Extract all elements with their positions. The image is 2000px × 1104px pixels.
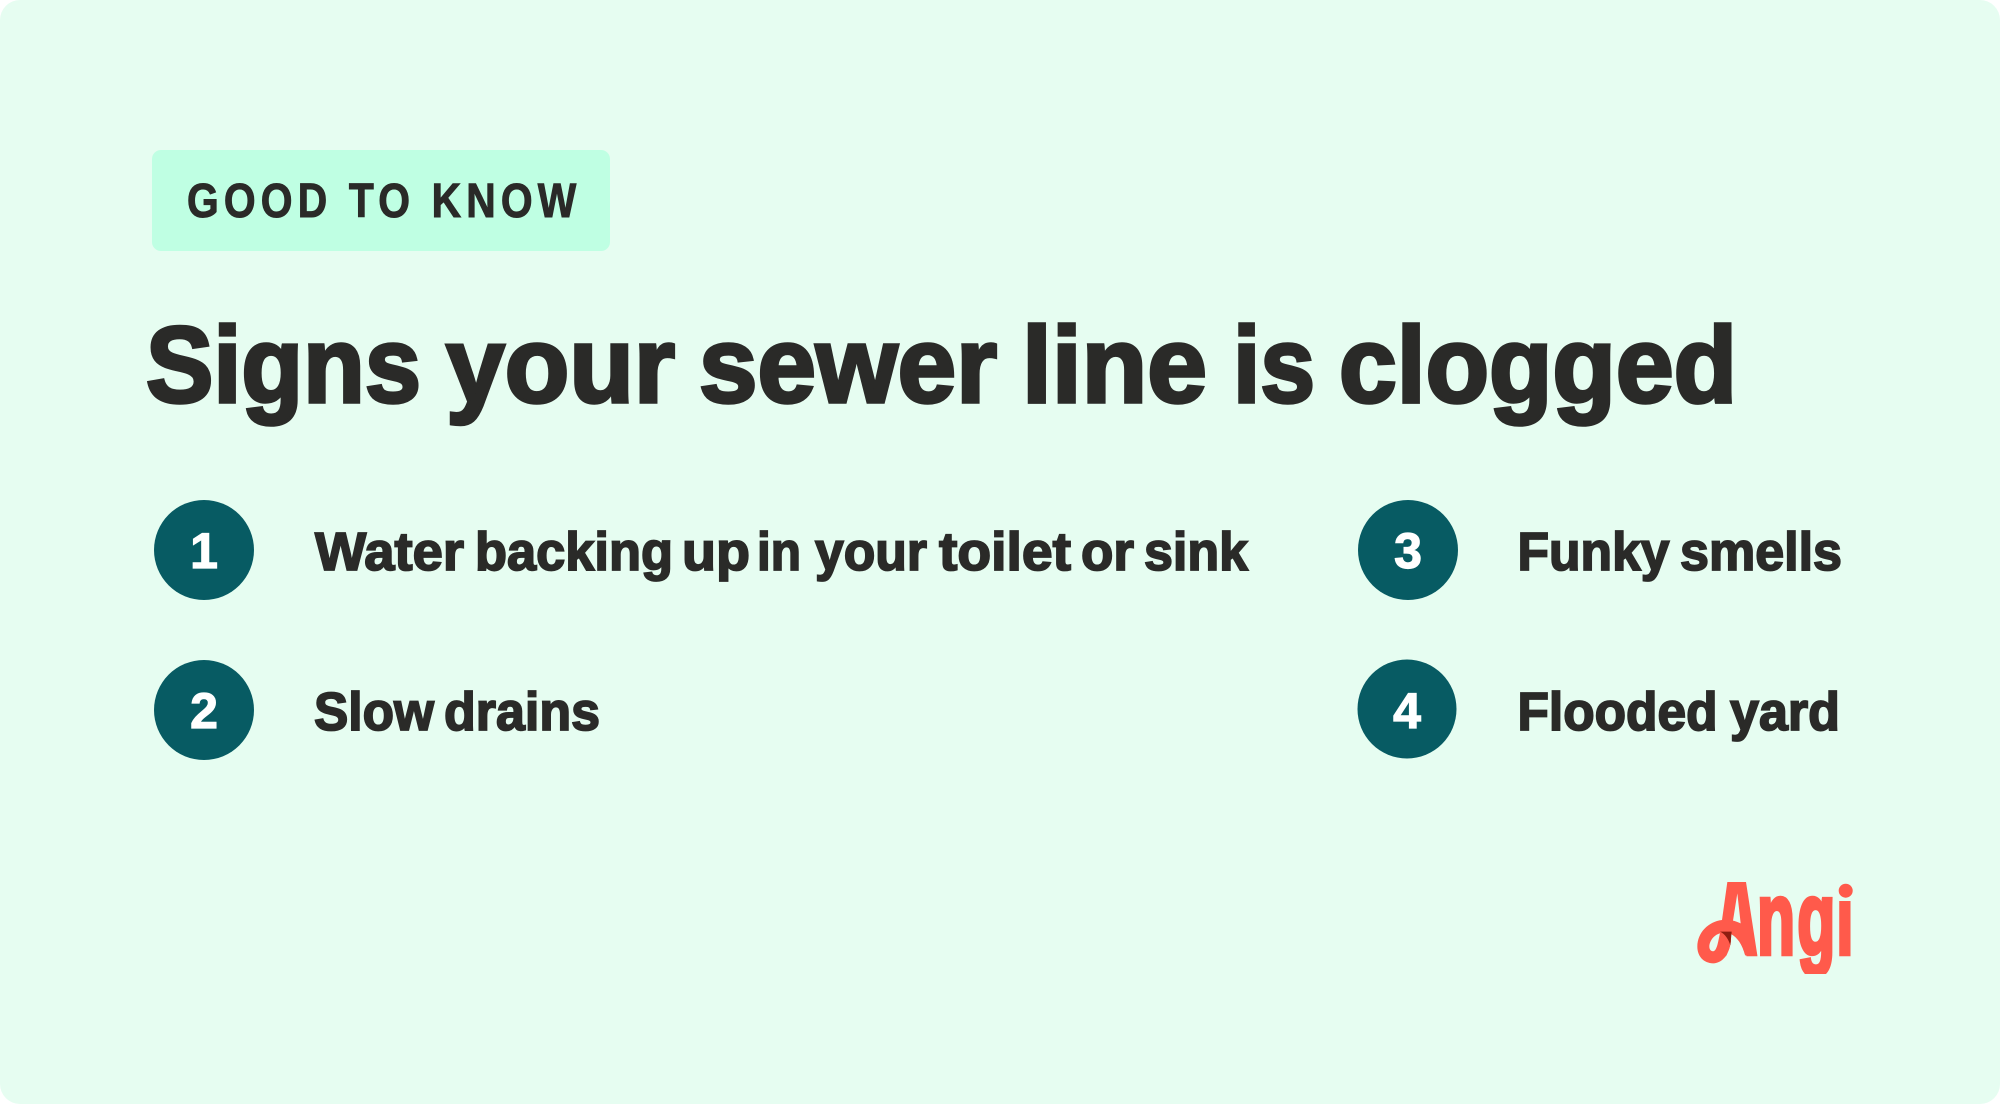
logo: Angi: Angi bbox=[1716, 861, 1854, 977]
list item 3 bbox=[1358, 500, 1842, 600]
list item 3: Funky bbox=[1518, 522, 1670, 582]
list item 1: or bbox=[1081, 522, 1134, 582]
list item 4: Flooded bbox=[1518, 682, 1718, 742]
list item 2 bbox=[154, 660, 600, 760]
list item 1: 1 bbox=[190, 523, 218, 579]
title: line bbox=[1022, 304, 1207, 425]
list item 2: drains bbox=[444, 682, 600, 742]
list item 4: 4 bbox=[1393, 683, 1421, 739]
list item 2: Slow bbox=[314, 682, 435, 742]
badge: good to know bbox=[152, 150, 610, 251]
list item 1: up bbox=[682, 522, 750, 582]
title: is bbox=[1233, 304, 1315, 425]
list item 1: sink bbox=[1144, 522, 1249, 582]
list item 4 bbox=[1358, 660, 1840, 758]
title: clogged bbox=[1339, 304, 1737, 425]
list item 1: Water bbox=[315, 522, 464, 582]
title bbox=[146, 304, 1737, 425]
list item 1: your bbox=[815, 522, 927, 582]
badge: good to know: GOOD TO KNOW bbox=[187, 175, 576, 228]
list item 3: smells bbox=[1680, 522, 1842, 582]
list item 3: 3 bbox=[1394, 523, 1422, 579]
list item 1: toilet bbox=[939, 522, 1071, 582]
title: Signs bbox=[146, 304, 421, 425]
list item 2: 2 bbox=[190, 683, 218, 739]
list item 4: yard bbox=[1730, 682, 1840, 742]
list item 1 bbox=[154, 500, 1249, 600]
list item 1: backing bbox=[475, 522, 673, 582]
list item 1: in bbox=[757, 522, 801, 582]
title: sewer bbox=[699, 304, 997, 425]
title: your bbox=[446, 304, 675, 425]
